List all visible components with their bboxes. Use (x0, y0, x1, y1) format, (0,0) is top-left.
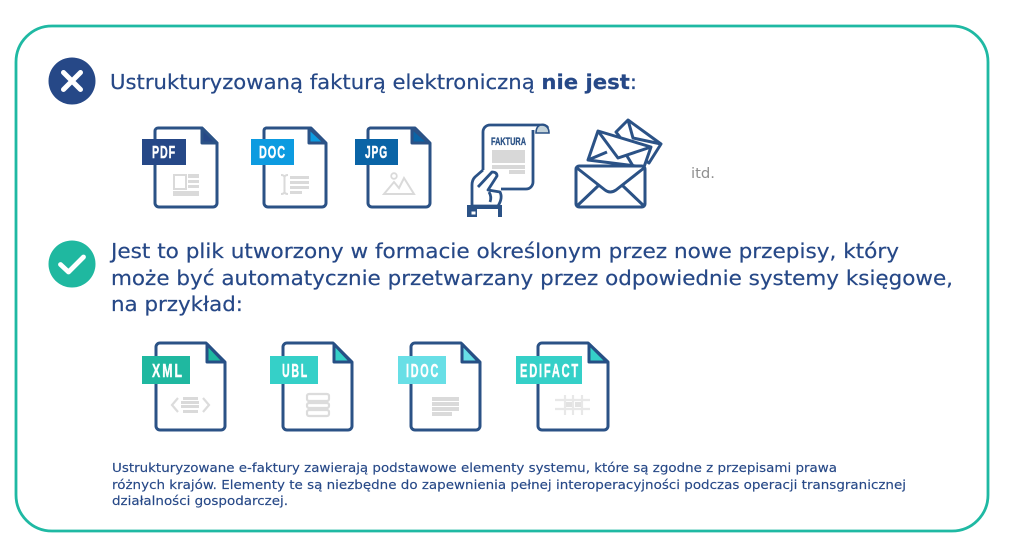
icon: PDF file: PDF (152, 142, 176, 162)
icon: hand holding paper invoice: FAKTURA (491, 136, 526, 148)
footnote text: różnych krajów. Elementy te są niezbędne do zapewnienia pełnej interoperacyjności podczas operacji transgranicznej (112, 477, 906, 492)
heading: what it is: Jest to plik utworzony w formacie określonym przez nowe przepisy, który (109, 239, 899, 263)
icon: XML file (142, 343, 225, 430)
icon: EDIFACT file: EDIFACT (520, 360, 580, 381)
icon: cross in navy circle (48, 58, 96, 104)
heading: what it is not: Ustrukturyzowaną fakturą elektroniczną nie jest: (110, 70, 637, 94)
icon: PDF file (142, 128, 217, 207)
icon: EDIFACT file (516, 343, 608, 430)
heading: what it is: na przykład: (111, 292, 243, 316)
icon: UBL file (270, 343, 352, 430)
footnote text (112, 460, 906, 508)
icon: IDOC file: IDOC (406, 360, 440, 381)
icon: IDOC file (398, 343, 480, 430)
text: itd.: itd. (691, 166, 715, 182)
icon: DOC file (251, 128, 326, 207)
icon: UBL file: UBL (282, 360, 309, 381)
heading: what it is (109, 239, 953, 316)
heading: what it is: może być automatycznie przetwarzany przez odpowiednie systemy księgowe, (111, 266, 953, 290)
icon: check in teal circle (48, 240, 96, 288)
footnote text: działalności gospodarczej. (112, 493, 288, 508)
icon: JPG file: JPG (365, 142, 388, 162)
icon: DOC file: DOC (259, 142, 286, 162)
icon: JPG file (355, 128, 430, 207)
icon: XML file: XML (152, 360, 184, 381)
icon: envelopes (576, 120, 661, 207)
icon: hand holding paper invoice (467, 125, 549, 217)
footnote text: Ustrukturyzowane e-faktury zawierają podstawowe elementy systemu, które są zgodne z przepisami prawa (112, 460, 837, 475)
